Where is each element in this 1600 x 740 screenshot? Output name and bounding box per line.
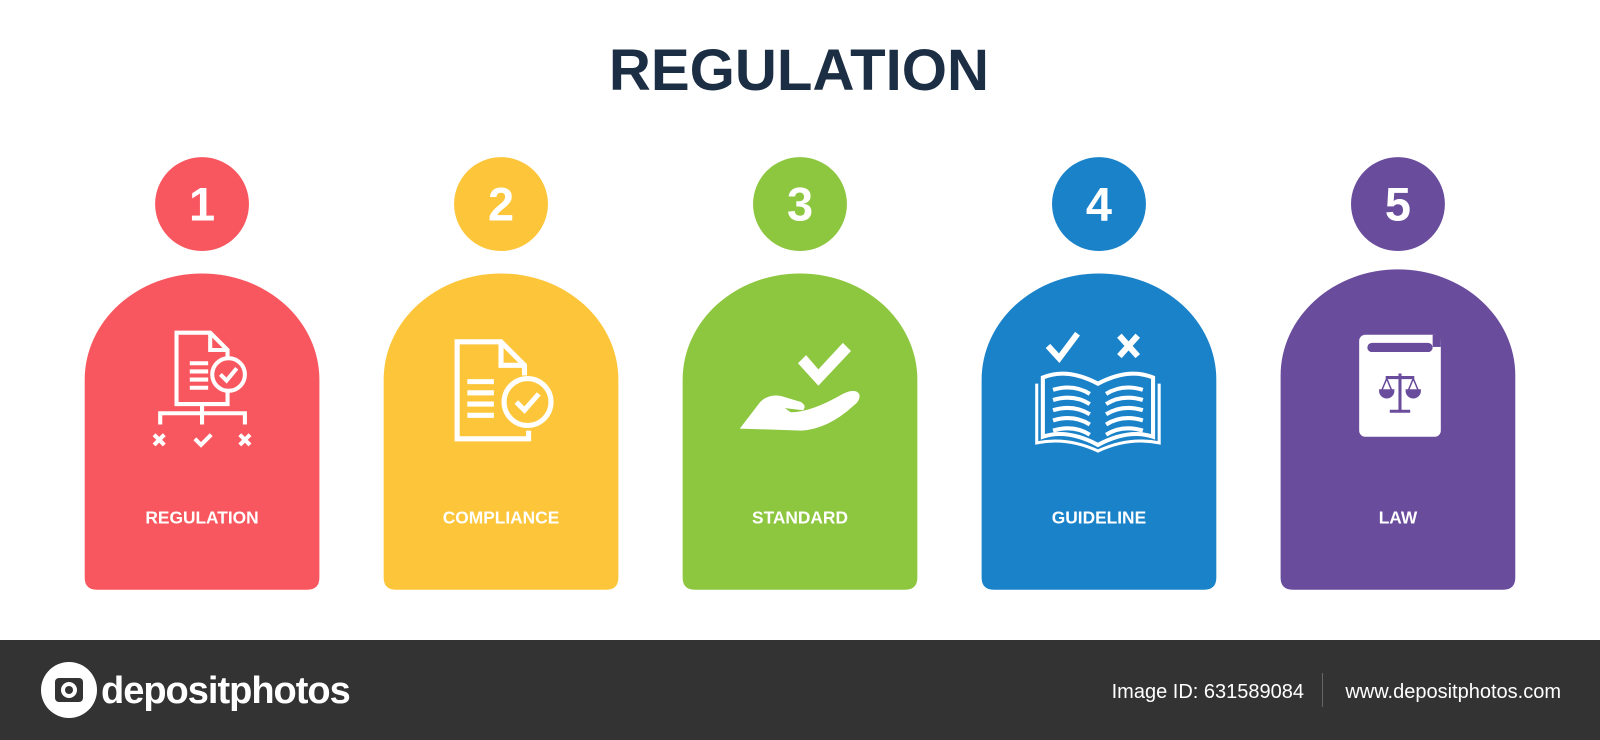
number badge 1: 1 <box>189 178 215 230</box>
step 5: law <box>1281 157 1515 590</box>
footer bar <box>0 640 1600 740</box>
icon: document with check <box>457 342 551 439</box>
step 4: guideline <box>982 157 1216 590</box>
icon: law book with scales <box>1359 335 1441 437</box>
number badge 3: 3 <box>787 178 813 230</box>
card 3 <box>683 273 917 590</box>
icon: hand with check <box>740 343 860 431</box>
card 2 <box>384 273 618 590</box>
card 1 <box>85 273 319 590</box>
main content <box>85 38 1515 590</box>
icon: open book with check and cross <box>1037 334 1159 451</box>
step 1: regulation <box>85 157 319 590</box>
label 2: COMPLIANCE <box>443 507 559 527</box>
step 2: compliance <box>384 157 618 590</box>
title: REGULATION <box>609 38 989 103</box>
number badge 4: 4 <box>1086 178 1112 230</box>
number badge 5: 5 <box>1385 178 1411 230</box>
footer logo: depositphotos <box>101 670 350 712</box>
number badge 1 <box>155 157 249 251</box>
footer image id: Image ID: 631589084 <box>1112 681 1304 703</box>
number badge 2 <box>454 157 548 251</box>
card 4 <box>982 273 1216 590</box>
label 4: GUIDELINE <box>1052 507 1146 527</box>
card 5 <box>1281 269 1515 590</box>
footer url: www.depositphotos.com <box>1344 681 1561 703</box>
icon: document hierarchy <box>154 333 250 445</box>
label 5: LAW <box>1379 507 1418 527</box>
footer logo <box>41 662 350 718</box>
label 3: STANDARD <box>752 507 848 527</box>
number badge 4 <box>1052 157 1146 251</box>
label 1: REGULATION <box>145 507 259 527</box>
number badge 5 <box>1351 157 1445 251</box>
number badge 3 <box>753 157 847 251</box>
number badge 2: 2 <box>488 178 514 230</box>
step 3: standard <box>683 157 917 590</box>
